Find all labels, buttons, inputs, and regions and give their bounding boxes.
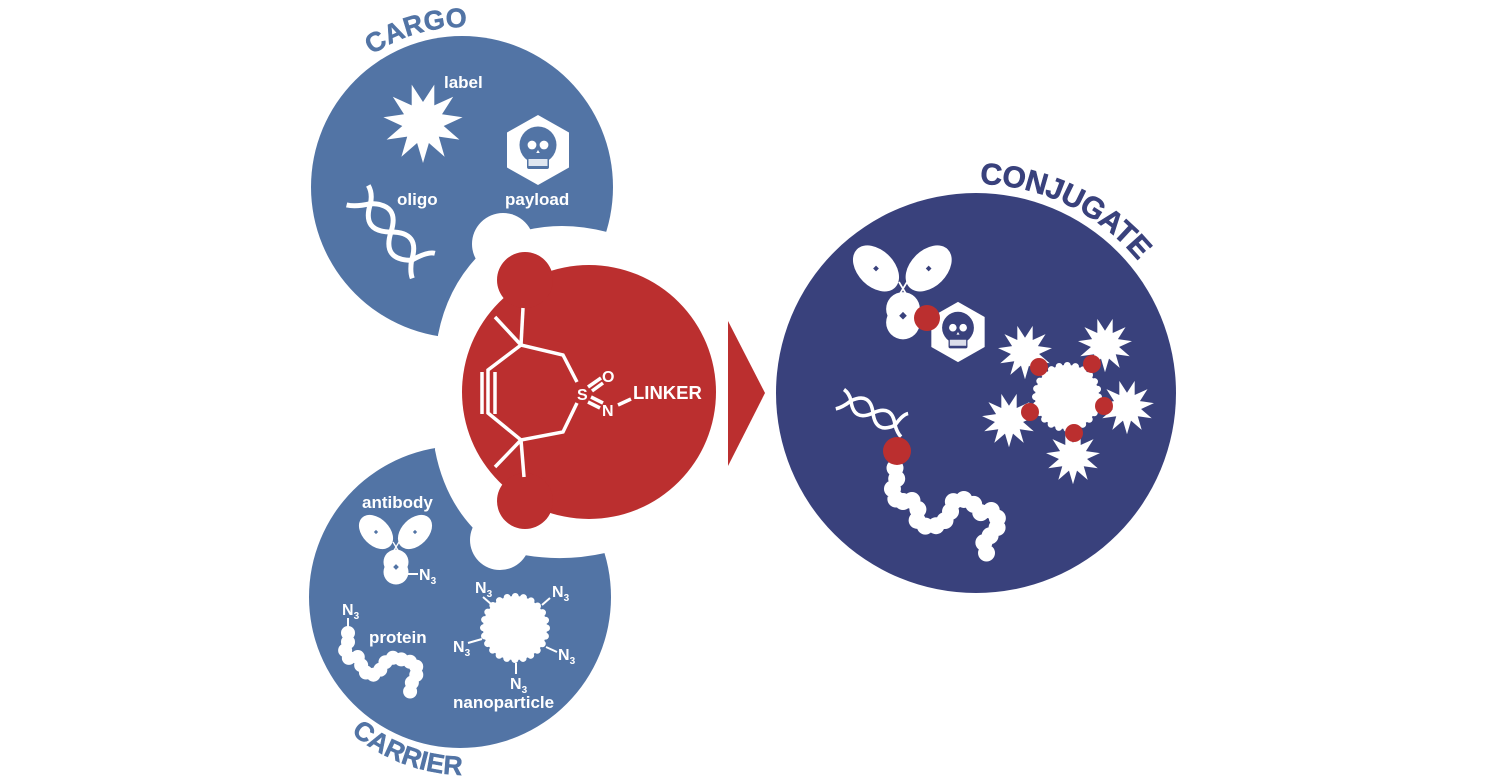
text: linker: LINKER xyxy=(633,382,702,403)
white halo around linker xyxy=(432,213,752,570)
azides on nanoparticle: N xyxy=(510,676,522,693)
heading: carrier: CARRIER xyxy=(354,722,462,776)
azide on protein xyxy=(342,602,360,630)
heading: conjugate: CONJUGATE xyxy=(982,163,1153,260)
azides on nanoparticle: N xyxy=(558,647,570,664)
heading: cargo: CARGO xyxy=(366,8,466,52)
icon: antibody conjugate xyxy=(844,236,961,339)
carrier circle xyxy=(309,446,611,748)
text: antibody: antibody xyxy=(362,493,433,512)
icon: label star xyxy=(383,85,463,163)
cyclooctyne structure xyxy=(482,308,631,477)
text: payload: payload xyxy=(505,190,569,209)
text: N atom: N xyxy=(602,403,614,420)
panel: carrier xyxy=(309,448,611,776)
text: nanoparticle: nanoparticle xyxy=(453,693,554,712)
panel: linker xyxy=(432,213,752,570)
azides on nanoparticle xyxy=(453,580,576,696)
text: protein: protein xyxy=(369,628,427,647)
icon: oligo helix xyxy=(345,177,439,284)
linker red body xyxy=(462,252,716,529)
azide on antibody: 3 xyxy=(431,576,437,587)
azides on nanoparticle: 3 xyxy=(570,656,576,667)
azides on nanoparticle: 3 xyxy=(487,589,493,600)
panel: conjugate xyxy=(776,163,1176,593)
azides on nanoparticle: N xyxy=(475,580,487,597)
text: label: label xyxy=(444,73,483,92)
text: oligo: oligo xyxy=(397,190,438,209)
text: S atom: S xyxy=(577,387,588,404)
cargo circle xyxy=(311,36,613,338)
red link: oligo to protein xyxy=(883,437,911,465)
azide on protein: 3 xyxy=(354,611,360,622)
icon: payload hexagon xyxy=(931,302,985,362)
icon: protein conjugate chain xyxy=(892,468,1000,562)
red link: antibody to payload xyxy=(914,305,940,331)
azides on nanoparticle: N xyxy=(552,584,564,601)
icon: protein chain xyxy=(345,633,418,698)
azide on protein: N xyxy=(342,602,354,619)
panel: cargo xyxy=(311,8,613,336)
azides on nanoparticle: 3 xyxy=(522,685,528,696)
azides on nanoparticle: 3 xyxy=(465,648,471,659)
icon: antibody xyxy=(352,508,439,584)
icon: payload hexagon with skull xyxy=(507,115,569,185)
azide on antibody xyxy=(407,567,437,587)
text: O atom: O xyxy=(602,369,614,386)
azides on nanoparticle: N xyxy=(453,639,465,656)
azide on antibody: N xyxy=(419,567,431,584)
arrow xyxy=(728,321,765,466)
icon: oligo conjugate helix xyxy=(834,381,913,443)
icon: nanoparticle with labels xyxy=(982,319,1154,484)
conjugate circle xyxy=(776,193,1176,593)
azides on nanoparticle: 3 xyxy=(564,593,570,604)
icon: nanoparticle xyxy=(483,596,547,660)
